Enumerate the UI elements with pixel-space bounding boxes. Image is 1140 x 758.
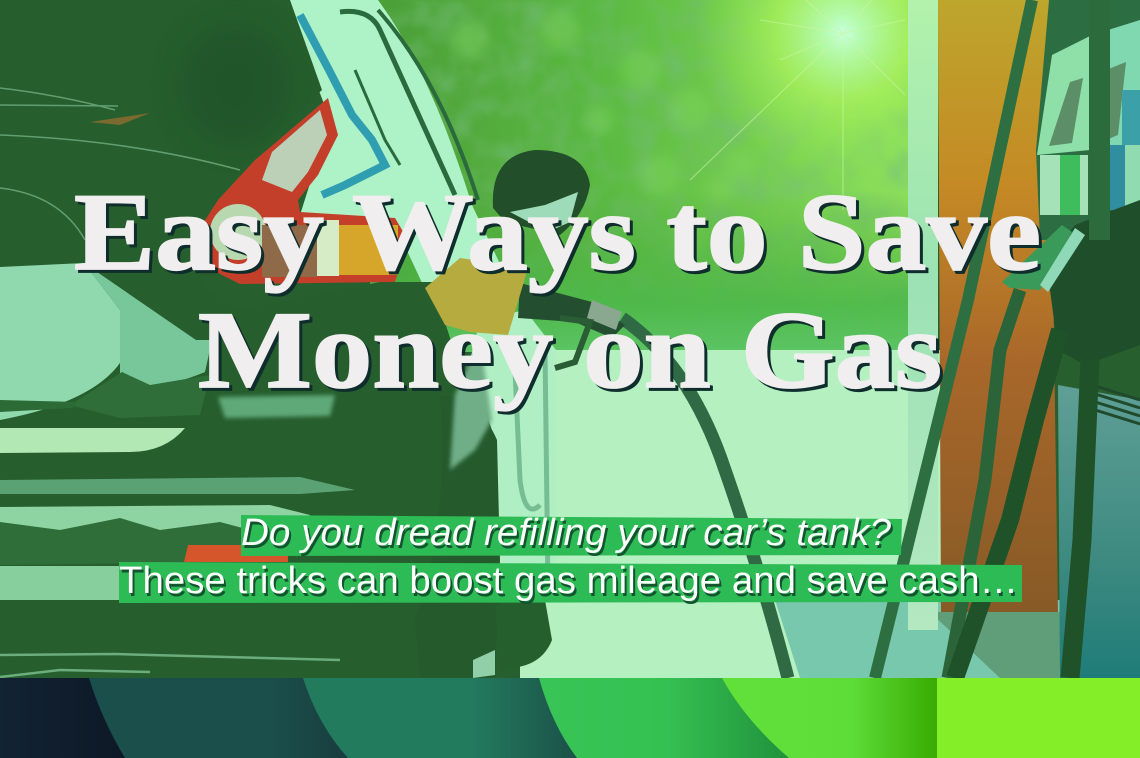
tail light [202,98,408,284]
band 1 navy [0,678,140,758]
tree reflection on glass [70,372,210,418]
arch highlight [450,340,492,470]
bumper reflection lower [0,566,230,600]
light side panel [470,310,556,600]
title line 2: Money on Gas [198,289,942,411]
vertical hose on pump [1089,29,1110,240]
fuel nozzle and hose [425,258,788,678]
red reflector [184,545,288,562]
wheel highlight [473,650,495,678]
amber lens [338,225,398,275]
side window reflection [290,0,500,282]
green nozzle boot [1002,225,1072,290]
side mirror [493,150,590,235]
band 2 dark teal [89,678,350,758]
band 5 bright green [722,678,938,758]
decorative colour band [0,678,1140,758]
window frame dark strokes [340,10,478,200]
subtitle line 1 highlight [241,515,902,556]
hoses at right [875,0,1090,678]
nozzle collar [587,300,622,330]
white lens [315,220,339,276]
dark strip on glass [0,400,78,412]
pump label stripes [1040,145,1140,215]
hatch crease lines [0,88,240,240]
round reflector [210,204,266,260]
pump display panels [1037,35,1092,155]
subtitle line 2 highlight [119,562,1022,603]
bumper crease band [0,477,355,494]
bumper reflection upper [0,505,310,530]
orange reflection [90,113,150,125]
blue reflection stripe [300,15,385,195]
title [74,171,1041,411]
subtitle line 1: Do you dread refilling your car’s tank? [241,512,892,554]
hose: thick pipe [955,330,1060,678]
rear window light glass [0,263,122,420]
nozzle highlight [1040,228,1085,292]
hose: right vertical [1070,360,1090,678]
treeline reflection [0,518,250,565]
tyre [495,600,552,668]
pump upper body [1036,0,1140,240]
hose: thin pipe [948,290,1020,678]
pump vent slats [1092,385,1140,424]
nozzle handle [518,283,625,338]
blurred foliage background [370,0,915,352]
lower bumper lines [0,654,340,677]
mirror highlight [510,192,578,232]
main fuel hose [622,318,788,678]
bright sill reflection [0,428,185,453]
yellow fuel cap flap [425,258,528,335]
hatch shading [202,46,268,124]
orange pump-island wall [938,0,1058,612]
pump housing lower panel [1058,385,1140,678]
rear wheel and arch [415,310,556,678]
tail light lens [262,110,327,192]
title line 1: Easy Ways to Save [74,171,1041,293]
hose: long diagonal [875,0,1032,678]
band 6 lime [937,678,1140,758]
subtitle line 2: These tricks can boost gas mileage and save cash… [119,560,1018,602]
dark lens body [262,225,317,277]
band 3 green teal [303,678,580,758]
pale concrete forecourt [520,350,950,678]
rear dark hatch [285,0,450,352]
wheel arch dark [415,395,500,678]
car body [0,0,510,678]
pillar [908,0,938,630]
tiled kerb [775,600,1060,678]
side panel reflection streaks [515,350,548,590]
grey ground patch [930,612,1062,678]
right gas pump [1002,0,1140,678]
side reflection patch [218,395,335,418]
band 4 green [539,678,795,758]
sun glare [690,0,938,210]
lighter glass patch behind [92,272,210,385]
subtitle [119,512,1022,603]
trigger guard [555,318,590,368]
nozzle holster cluster [1050,200,1140,365]
